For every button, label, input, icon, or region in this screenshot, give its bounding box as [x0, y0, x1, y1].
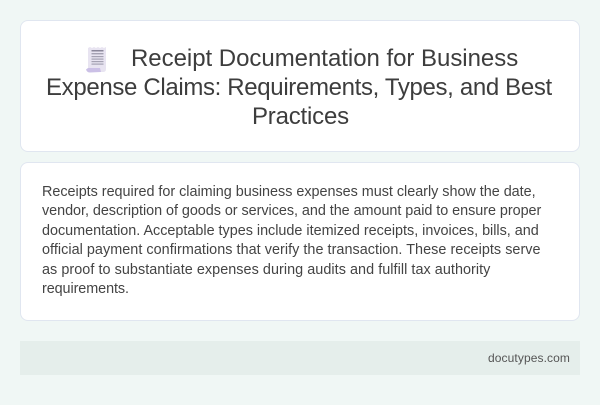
panel: title card	[20, 20, 580, 152]
icon: receipt	[86, 47, 106, 72]
description text: documentation. Acceptable types include itemized receipts, invoices, bills, and	[42, 223, 539, 239]
title: Receipt Documentation for Business	[131, 45, 518, 72]
title: Expense Claims: Requirements, Types, and Best	[46, 74, 552, 101]
panel: description card	[20, 162, 580, 321]
description text: official payment confirmations that verify the transaction. These receipts serve	[42, 242, 541, 258]
description text	[42, 184, 542, 297]
footer bar	[20, 341, 580, 375]
description text: requirements.	[42, 281, 129, 297]
title	[46, 45, 552, 130]
description text: Receipts required for claiming business expenses must clearly show the date,	[42, 184, 536, 200]
description text: as proof to substantiate expenses during audits and fulfill tax authority	[42, 262, 490, 278]
title: Practices	[252, 103, 349, 130]
footer source text: docutypes.com	[488, 351, 570, 365]
description text: vendor, description of goods or services, and the amount paid to ensure proper	[42, 203, 541, 219]
